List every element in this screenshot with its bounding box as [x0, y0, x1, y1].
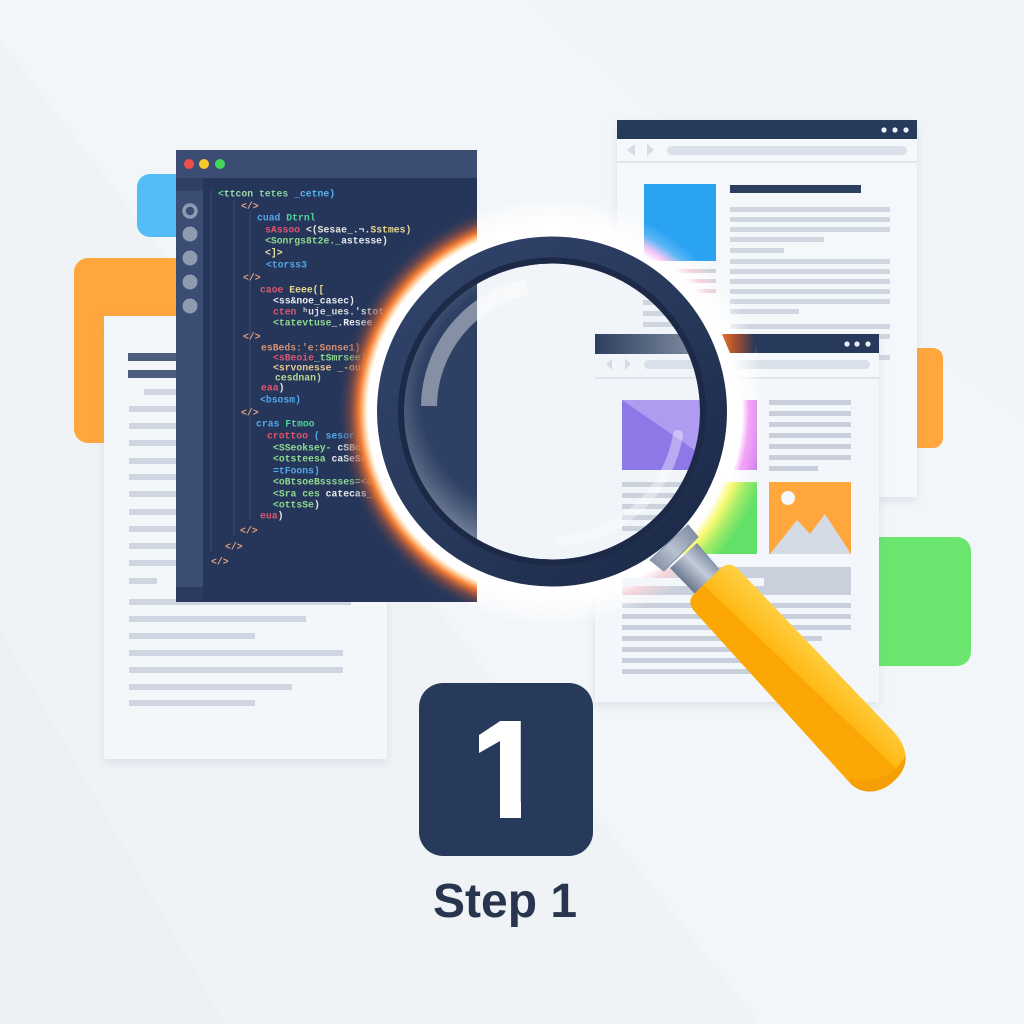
sidebar icons [182, 205, 198, 314]
code text: <torss3 [266, 260, 307, 270]
window controls [184, 159, 225, 169]
lens highlight: upper left arc [421, 300, 477, 406]
code text: <tatevtuse_.Resee [273, 318, 373, 328]
code text: </> [225, 542, 243, 552]
code text: <sBeoie_tSmrsee) [273, 352, 367, 364]
magnifier ring [390, 250, 714, 573]
code text: <otsteesa caSeSr [273, 454, 367, 464]
white glow behind magnifier [337, 196, 767, 626]
code text: cuad Dtrnl [257, 212, 316, 224]
panel: left text document [104, 316, 387, 759]
code text: <ttcon tetes _cetne) [218, 188, 335, 200]
code text: </> [211, 556, 229, 568]
handle collar [650, 525, 698, 571]
code text: cten ʰuje_ues.'stotse:) [273, 306, 408, 318]
code text [211, 188, 411, 568]
code text: </> [240, 526, 258, 536]
handle neck [670, 543, 722, 597]
code text: caoe Eeee([ [260, 284, 324, 296]
orange glow on code panel [339, 214, 477, 602]
text lines under blue image [644, 269, 716, 293]
code text: eua) [260, 510, 283, 522]
code text: </> [241, 408, 259, 418]
image placeholder: blue [644, 184, 716, 261]
decorative card: blue [137, 174, 217, 237]
code text: <Sra ces catecas_.(oo [273, 488, 396, 500]
code text: <bsosm) [260, 394, 301, 406]
decorative card: orange right [880, 348, 943, 448]
image placeholder: purple [622, 400, 757, 470]
panel: code editor [176, 150, 477, 602]
code text: <SSeoksey- cSBou/ [273, 442, 373, 454]
step badge [419, 683, 593, 856]
badge number: 1 [468, 694, 544, 848]
code text: </> [243, 272, 261, 284]
code text: cras Ftmoo [256, 418, 315, 430]
code text: <Sonrgs8t2e._astesse) [265, 236, 388, 246]
magnifier lens contents [400, 260, 714, 565]
image placeholder: green [622, 482, 757, 554]
orange glow on window title bar [722, 334, 755, 353]
code text: <srvonesse _-oucsl [273, 362, 378, 374]
magnifier handle [650, 525, 920, 800]
code text: <oBtsoeBsssses=<oP [273, 476, 378, 488]
code text: eaa) [261, 382, 284, 394]
code text: <]> [265, 248, 283, 258]
image placeholder: orange landscape [769, 482, 851, 554]
handle grip [690, 564, 906, 792]
code text: crottoo ( sesor] [267, 430, 361, 442]
banner bar [622, 567, 851, 595]
panel: right back browser window [617, 120, 917, 497]
code text: </> [243, 332, 261, 342]
code text: <ottsSe) [273, 500, 320, 510]
decorative card: orange left [74, 258, 254, 443]
code text: <ss&noe_casec) [273, 296, 355, 306]
code text: =tFoons) [273, 466, 320, 476]
step label: Step 1 [433, 875, 577, 928]
code text: </> [241, 201, 259, 212]
decorative card: green [830, 537, 971, 666]
code text: sAssoo <(Sesae_.¬.Sstmes) [265, 224, 411, 236]
panel: front browser window [595, 334, 879, 702]
code text: cesdnan) [275, 372, 322, 384]
code text: esBeds:'e:Sonse1) [261, 342, 360, 354]
lens highlight: lower right arc [622, 430, 683, 520]
